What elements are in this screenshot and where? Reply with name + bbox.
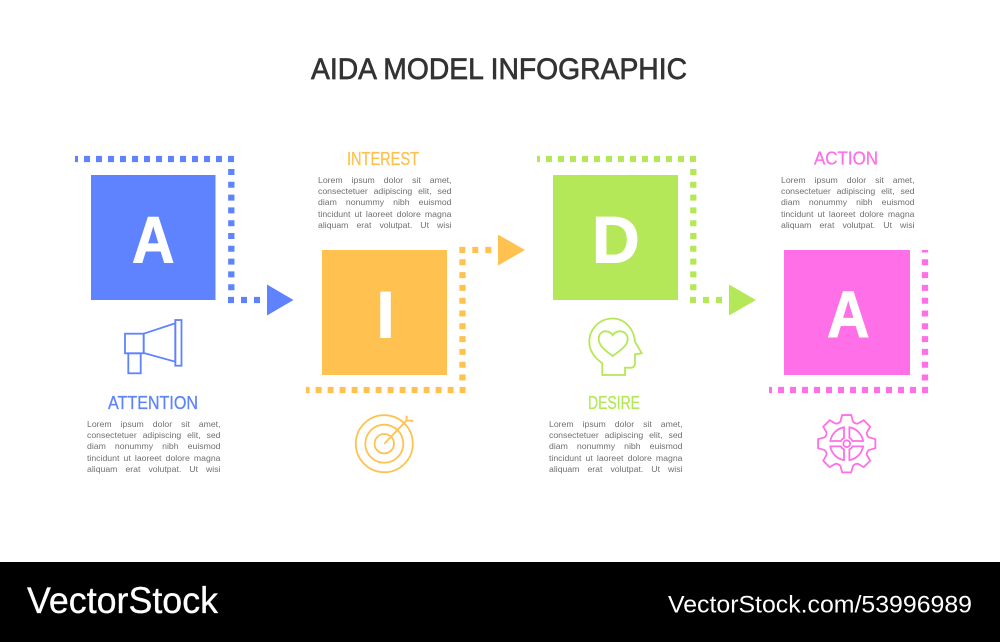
text block: interest: diam nonummy nibh euismod — [318, 197, 452, 207]
icon: megaphone — [125, 320, 182, 373]
icon: gear — [818, 415, 875, 472]
heading: interest: INTEREST — [347, 149, 419, 169]
text block: action: aliquam erat volutpat. Ut wisi — [781, 220, 914, 230]
footer image id: VectorStock.com/53996989 — [668, 592, 972, 618]
dotted connector with arrow — [75, 159, 294, 316]
letter square: A — [91, 175, 216, 300]
letter square: I — [322, 250, 447, 375]
letter square: D: D — [592, 202, 640, 276]
panel: desire — [537, 159, 756, 477]
text block: attention: consectetuer adipiscing elit, sed — [87, 430, 220, 440]
dotted connector with arrow — [537, 159, 756, 316]
text block: interest: consectetuer adipiscing elit, sed — [318, 186, 452, 196]
letter square: D — [553, 175, 678, 300]
title: AIDA MODEL INFOGRAPHIC — [311, 53, 687, 86]
letter square: I: I — [376, 278, 395, 352]
text block: action — [781, 175, 914, 233]
text block: interest: aliquam erat volutpat. Ut wisi — [318, 220, 452, 230]
icon: target — [356, 415, 413, 472]
dotted connector — [769, 250, 928, 390]
text block: desire: Lorem ipsum dolor sit amet, — [549, 419, 682, 429]
letter square: A: A — [132, 202, 174, 276]
text block: action: consectetuer adipiscing elit, sed — [781, 186, 914, 196]
letter square: A: A — [827, 277, 870, 351]
text block: attention: aliquam erat volutpat. Ut wisi — [87, 464, 220, 474]
text block: desire — [549, 419, 682, 477]
text block: attention: diam nonummy nibh euismod — [87, 441, 220, 451]
heading: attention: ATTENTION — [108, 393, 198, 413]
text block: interest — [318, 175, 452, 233]
text block: action: Lorem ipsum dolor sit amet, — [781, 175, 914, 185]
icon: head with heart — [589, 318, 642, 375]
text block: action: tincidunt ut laoreet dolore magna — [781, 209, 914, 219]
panel: interest — [306, 149, 525, 472]
panel: action — [769, 148, 928, 472]
footer bar — [0, 562, 1000, 642]
text block: desire: diam nonummy nibh euismod — [549, 441, 682, 451]
text block: interest: Lorem ipsum dolor sit amet, — [318, 175, 452, 185]
heading: desire: DESIRE — [588, 393, 640, 413]
letter square: A — [784, 250, 910, 375]
text block: desire: consectetuer adipiscing elit, sed — [549, 430, 682, 440]
heading: action: ACTION — [814, 148, 878, 168]
text block: attention: tincidunt ut laoreet dolore magna — [87, 453, 220, 463]
text block: attention: Lorem ipsum dolor sit amet, — [87, 419, 220, 429]
dotted connector with arrow — [306, 234, 525, 390]
text block: attention — [87, 419, 220, 477]
text block: desire: aliquam erat volutpat. Ut wisi — [549, 464, 682, 474]
panel: attention — [75, 159, 294, 477]
footer logo: VectorStock — [27, 580, 218, 621]
text block: desire: tincidunt ut laoreet dolore magna — [549, 453, 682, 463]
text block: action: diam nonummy nibh euismod — [781, 197, 914, 207]
text block: interest: tincidunt ut laoreet dolore magna — [318, 209, 452, 219]
